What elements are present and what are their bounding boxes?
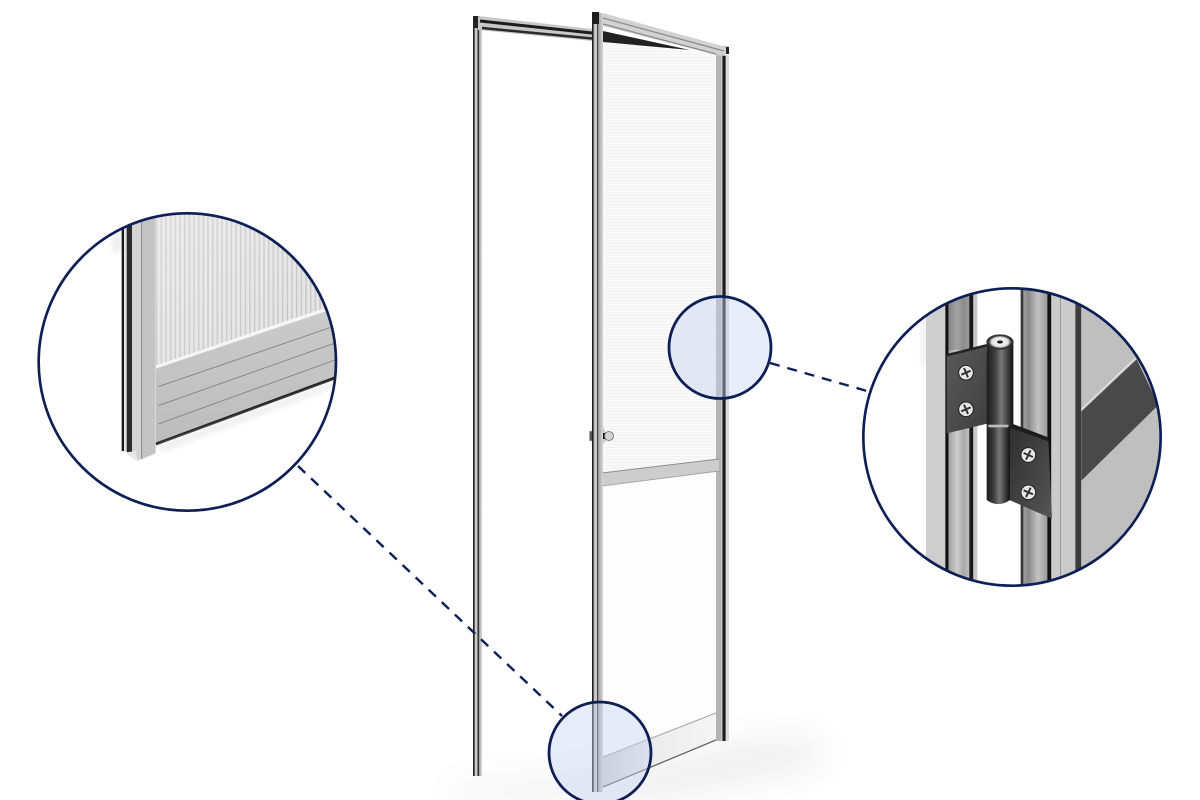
detail circle: bottom sill (39, 212, 337, 511)
dashed connector: hinge (770, 363, 867, 391)
fixed frame top rail (478, 16, 690, 50)
door screen mesh (603, 42, 716, 757)
door handle (590, 426, 614, 444)
highlight circle: bottom sill location (549, 702, 651, 800)
hinge pin (987, 342, 1013, 427)
screen mesh with rail behind (1081, 307, 1160, 567)
highlight circle: hinge location (669, 296, 771, 398)
fixed frame right post (713, 45, 729, 741)
fixed frame left post (473, 16, 482, 776)
screws (959, 365, 973, 380)
mesh (156, 212, 337, 368)
door middle rail (602, 459, 719, 486)
dashed connector: sill (298, 466, 562, 716)
hinge upper leaf (947, 344, 988, 433)
sill panel (156, 308, 337, 442)
floor shade (157, 381, 337, 452)
detail circle: hinge (863, 287, 1168, 587)
post (122, 212, 124, 451)
door top rail (603, 13, 726, 56)
door bottom kick panel (603, 713, 716, 787)
door hinge-side post (592, 12, 603, 792)
floor shadow (440, 738, 820, 800)
aluminium profiles, fixed frame (922, 318, 926, 365)
shadow at left of post (112, 230, 122, 252)
aluminium profiles, door leaf (1021, 287, 1047, 587)
hinge lower leaf (1009, 424, 1052, 519)
